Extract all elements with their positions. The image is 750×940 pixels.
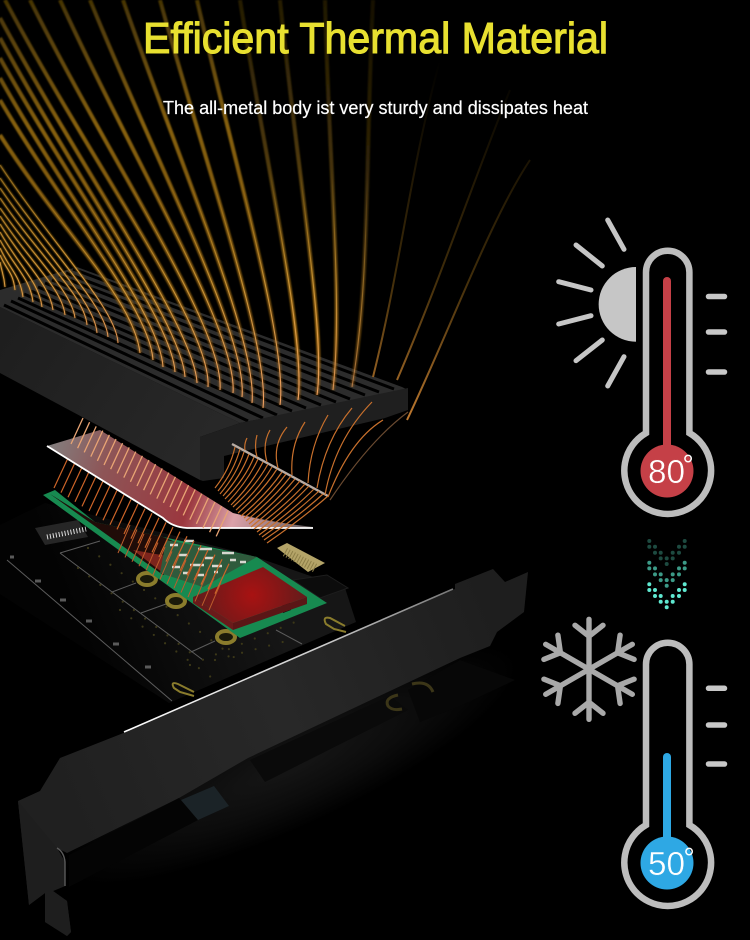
icon: sun bbox=[559, 220, 636, 386]
cool thermometer 50 degrees bbox=[624, 643, 724, 906]
M.2 SSD module bbox=[43, 490, 327, 638]
expansion card board bbox=[0, 503, 356, 703]
heat lines through the SSD bbox=[54, 458, 229, 610]
heatsink bbox=[0, 267, 408, 496]
hot thermometer 80 degrees: ° bbox=[682, 449, 694, 480]
SSD red heat chip bbox=[193, 567, 307, 630]
icon: cooling arrow dots bbox=[647, 539, 687, 609]
icon: snowflake bbox=[539, 619, 639, 719]
cool thermometer 50 degrees: 50 bbox=[648, 845, 685, 882]
glow below the bracket bbox=[37, 603, 543, 927]
title: Efficient Thermal Material bbox=[143, 14, 608, 63]
heat lines crossing the sheet bbox=[71, 418, 228, 536]
hot thermometer 80 degrees: 80 bbox=[648, 453, 685, 490]
subtitle: The all-metal body ist very sturdy and dissipates heat bbox=[163, 97, 588, 118]
PCI bracket bbox=[18, 569, 528, 936]
hot thermometer 80 degrees bbox=[624, 251, 724, 514]
heat lines between sheet and heatsink bbox=[215, 402, 408, 543]
thermal pad sheet bbox=[47, 430, 313, 528]
cool thermometer 50 degrees: ° bbox=[684, 842, 695, 873]
rising heat flow lines bbox=[0, 0, 530, 420]
bracket underside details bbox=[69, 660, 515, 887]
